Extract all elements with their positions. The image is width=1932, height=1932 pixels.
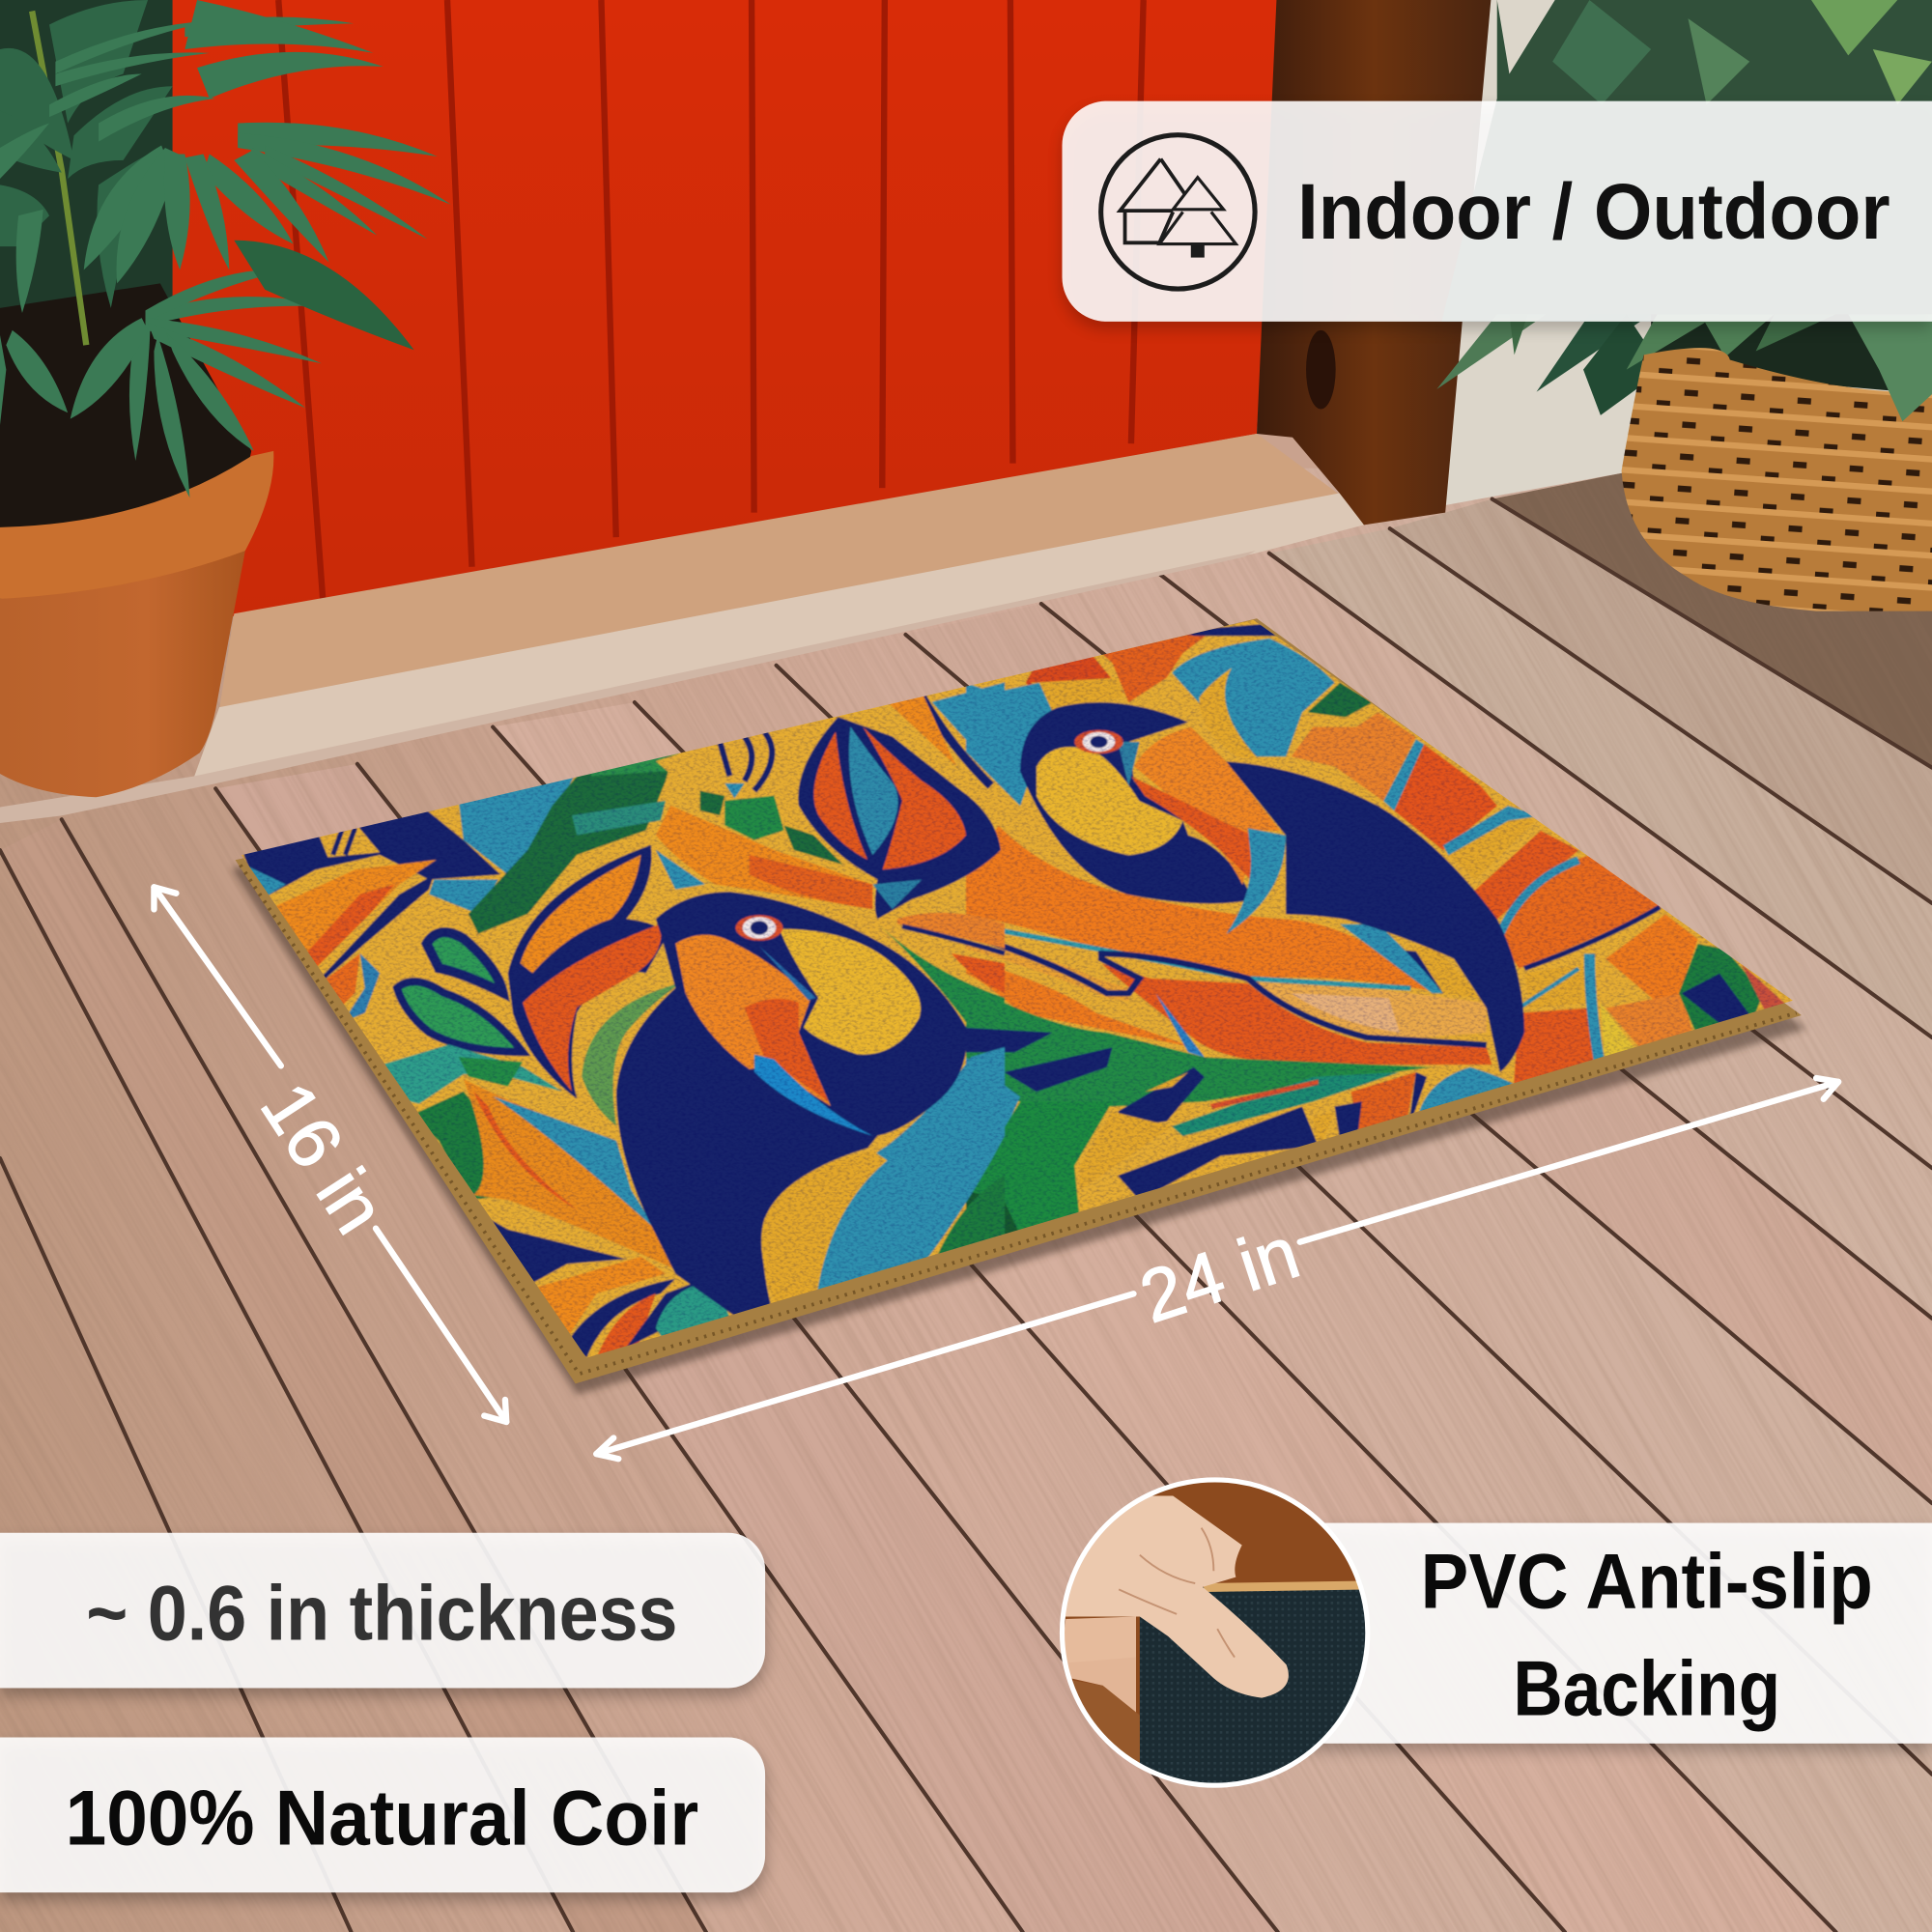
left palm plant	[0, 0, 451, 497]
panel: natural coir	[0, 1737, 765, 1900]
left plant pot	[0, 283, 273, 797]
door threshold	[0, 434, 1364, 823]
tulip	[798, 717, 1001, 919]
label: pvc anti-slip: PVC Anti-slip	[1421, 1539, 1873, 1626]
lower toucan	[616, 892, 967, 1323]
icon: house and tree in circle	[1101, 135, 1255, 289]
doormat	[232, 616, 1806, 1395]
panel: pvc backing	[1306, 1523, 1932, 1750]
upper toucan	[1020, 702, 1524, 1072]
dimension arrow: 24 in	[596, 1078, 1838, 1459]
panel: thickness	[0, 1533, 765, 1695]
wooden door post	[1257, 0, 1491, 525]
wall behind door	[0, 0, 1932, 616]
panel: indoor outdoor	[1062, 101, 1932, 329]
label: 24 in: 24 in	[1131, 1211, 1309, 1339]
mat rope edge stitching	[241, 865, 1797, 1374]
label: 16 in: 16 in	[244, 1068, 401, 1248]
dimension arrow: 16 in	[154, 887, 506, 1422]
label: backing: Backing	[1513, 1646, 1780, 1733]
right half of mat art	[966, 624, 1790, 1260]
wicker basket	[1622, 314, 1932, 611]
mat coir border	[236, 618, 1802, 1383]
red door	[173, 0, 1282, 616]
left half of mat art	[242, 682, 1005, 1357]
mat artwork: toucans and tropical leaves	[234, 616, 1805, 1386]
mat shadow	[232, 629, 1806, 1395]
right plant foliage	[1436, 0, 1932, 415]
icon: hand folding mat backing in circle	[1060, 1479, 1370, 1789]
label: natural coir: 100% Natural Coir	[66, 1775, 698, 1861]
label: thickness: ~ 0.6 in thickness	[86, 1571, 678, 1658]
label: indoor outdoor: Indoor / Outdoor	[1297, 168, 1890, 256]
